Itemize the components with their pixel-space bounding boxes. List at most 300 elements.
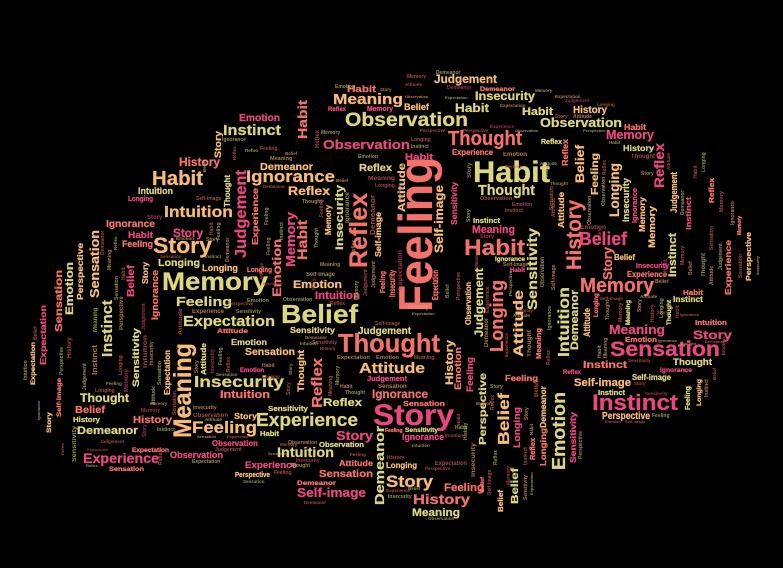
region: upper right lobe words: Habit bbox=[663, 259, 669, 272]
region: upper left lobe words: Ignorance bbox=[222, 137, 246, 143]
region: centre words: Judgement bbox=[358, 326, 412, 337]
region: tiny filler words: Memory bbox=[505, 164, 523, 169]
region: top centre words: Feeling bbox=[319, 199, 325, 217]
region: centre words: Insecurity bbox=[210, 349, 216, 373]
region: top centre words: Emotion bbox=[512, 202, 532, 208]
region: upper left lobe words: Perspective bbox=[59, 347, 65, 375]
region: upper right lobe words: Demeanor bbox=[680, 190, 686, 215]
region: upper right lobe words: Reflex bbox=[651, 143, 667, 188]
region: upper left lobe words bbox=[23, 113, 281, 473]
word: Belief khaki: Belief bbox=[281, 299, 358, 329]
region: top centre words: Memory bbox=[407, 74, 426, 80]
region: upper right lobe words: Thought bbox=[701, 253, 707, 277]
region: upper left lobe words: Sensation bbox=[87, 230, 102, 298]
region: upper right lobe words: Longing bbox=[606, 163, 622, 217]
region: upper left lobe words: Longing bbox=[95, 388, 115, 394]
region: lower right lobe words: Ignorance bbox=[660, 368, 693, 374]
region: tiny filler words: Attitude bbox=[540, 161, 557, 166]
region: top centre words: Observation bbox=[515, 128, 539, 133]
region: upper left lobe words: Sensitivity bbox=[72, 425, 78, 462]
region: upper right lobe words: Habit bbox=[693, 165, 699, 178]
word: History: History bbox=[563, 200, 586, 270]
region: middle vertical words: Perspective bbox=[508, 270, 513, 296]
region: upper left lobe words: History bbox=[179, 155, 220, 169]
region: lower right lobe words: Thought bbox=[667, 300, 673, 325]
region: lower words: Intuition bbox=[277, 444, 334, 460]
region: top centre words: Instinct bbox=[411, 144, 429, 150]
region: tiny filler words: Belief bbox=[285, 151, 298, 156]
region: upper left lobe words: Judgement bbox=[82, 363, 88, 390]
region: upper left lobe words: Demeanor bbox=[225, 237, 231, 262]
region: top centre words: Ignorance bbox=[495, 257, 526, 263]
region: tiny filler words: Memory bbox=[354, 281, 360, 300]
region: upper right lobe words: Attitude bbox=[551, 198, 557, 217]
word: Longing coral: Longing bbox=[487, 280, 507, 352]
word: Demeanor vertical: Demeanor bbox=[372, 426, 387, 505]
word: Observation vertical: Observation bbox=[464, 282, 473, 325]
region: centre words: Emotion bbox=[231, 338, 267, 347]
region: top centre words: Sensitivity bbox=[524, 228, 540, 310]
region: centre words: Feeling bbox=[465, 357, 475, 392]
region: upper right lobe words: Experience bbox=[627, 270, 668, 279]
region: top centre words: Experience bbox=[452, 148, 494, 157]
region: top centre words: Memory bbox=[283, 211, 298, 267]
region: upper right lobe words: Emotion bbox=[580, 225, 606, 231]
region: top centre words: Reflex bbox=[330, 301, 345, 307]
word: Feeling: Feeling bbox=[389, 157, 442, 312]
region: upper right lobe words: Habit bbox=[522, 106, 553, 118]
region: tiny filler words: Feeling bbox=[544, 164, 549, 180]
region: tiny filler words: Habit bbox=[262, 363, 275, 369]
region: lower right lobe words: Thought bbox=[527, 330, 533, 357]
word: Habit coral: Habit bbox=[464, 235, 526, 260]
region: lower right lobe words: Attitude bbox=[582, 308, 592, 337]
region: upper left lobe words: Feeling bbox=[122, 239, 153, 249]
region: top centre words: Habit bbox=[405, 152, 433, 162]
region: lower right lobe words: Story bbox=[657, 310, 669, 315]
region: lower right lobe words: Demeanor bbox=[705, 339, 725, 344]
region: tiny filler words: Observation bbox=[587, 196, 593, 225]
region: upper left lobe words: Sensation bbox=[54, 270, 65, 332]
region: lower right lobe words: Meaning bbox=[626, 300, 632, 325]
region: lower right lobe words: Emotion bbox=[605, 419, 622, 424]
region: tiny filler words: Longing bbox=[118, 355, 124, 375]
region: top centre words: Instinct bbox=[473, 218, 501, 225]
region: upper right lobe words: Longing bbox=[701, 152, 707, 172]
region: lower right lobe words: Feeling bbox=[685, 386, 692, 410]
region: lower right lobe words: Meaning bbox=[536, 328, 543, 359]
region: upper left lobe words: Story bbox=[173, 226, 203, 240]
region: upper left lobe words: Feeling bbox=[106, 381, 122, 386]
region: lower right lobe words: Habit bbox=[597, 345, 603, 358]
region: centre words: Experience bbox=[192, 309, 225, 315]
word: Feeling peach: Feeling bbox=[192, 418, 257, 437]
region: top centre words: Expectation bbox=[398, 250, 404, 290]
region: centre words: History bbox=[444, 339, 456, 385]
region: centre words: Attitude bbox=[178, 308, 184, 335]
region: upper left lobe words: Demeanor bbox=[77, 425, 139, 437]
region: top centre words: Ignorance bbox=[345, 191, 351, 223]
region: upper right lobe words: Perspective bbox=[744, 232, 753, 281]
region: tiny filler words: Reflex bbox=[245, 148, 259, 153]
region: tiny filler words: Story bbox=[206, 237, 219, 243]
region: upper right lobe words: Habit bbox=[683, 290, 704, 297]
region: top centre words: Attitude bbox=[405, 82, 422, 87]
region: centre words: Emotion bbox=[376, 355, 400, 361]
word: Belief pink: Belief bbox=[579, 229, 628, 249]
region: top centre words: Emotion bbox=[503, 152, 527, 158]
region: tiny filler words: Sensation bbox=[114, 276, 120, 300]
region: top centre words: Self-image bbox=[306, 272, 336, 278]
region: upper right lobe words: Judgement bbox=[565, 98, 590, 103]
region: centre words: Intuition bbox=[220, 389, 270, 401]
region: tiny filler words: Instinct bbox=[205, 254, 222, 259]
region: centre words: Sensation bbox=[243, 479, 265, 484]
region: lower right lobe words: Ignorance bbox=[680, 312, 700, 317]
region: middle vertical words bbox=[456, 249, 534, 357]
region: lower words: Longing bbox=[386, 461, 417, 470]
region: upper left lobe words: Feeling bbox=[176, 294, 232, 309]
region: tiny filler words: Habit bbox=[456, 413, 461, 425]
region: centre words: Expectation bbox=[337, 355, 371, 361]
region: lower words: Perspective bbox=[425, 466, 451, 471]
region: upper left lobe words: Observation bbox=[170, 450, 223, 460]
region: upper right lobe words: Judgement bbox=[669, 172, 679, 213]
region: centre words: Judgement bbox=[367, 376, 408, 383]
region: lower right lobe words: Reflex bbox=[563, 370, 582, 376]
region: lower right lobe words: Longing bbox=[594, 293, 600, 317]
region: upper right lobe words: Memory bbox=[638, 196, 647, 232]
region: upper left lobe words: Intuition bbox=[143, 335, 149, 368]
region: upper left lobe words: Demeanor bbox=[100, 230, 106, 255]
region: tiny filler words: Judgement bbox=[363, 269, 369, 296]
region: tiny filler words: Reflex bbox=[351, 240, 357, 255]
region: lower right lobe words: Feeling bbox=[652, 413, 670, 419]
region: upper left lobe words: Emotion bbox=[239, 113, 280, 124]
region: upper right lobe words: Ignorance bbox=[730, 201, 736, 225]
word: Instinct: Instinct bbox=[99, 300, 116, 357]
region: lower words: Reflex bbox=[530, 438, 537, 460]
region: upper left lobe words: Intuition bbox=[23, 360, 29, 380]
region: top centre words: Judgement bbox=[434, 72, 497, 86]
region: top centre words: Intuition bbox=[315, 290, 360, 302]
region: top centre words: Memory bbox=[324, 204, 333, 235]
region: tiny filler words: Reflex bbox=[490, 395, 496, 410]
region: upper left lobe words: Expectation bbox=[192, 459, 220, 465]
region: top centre words: Insecurity bbox=[388, 270, 397, 297]
region: top centre words: Emotion bbox=[270, 239, 284, 297]
word: Story right: Story bbox=[693, 328, 732, 342]
region: lower right lobe words: Emotion bbox=[721, 337, 726, 355]
word: Memory coral: Memory bbox=[580, 275, 655, 297]
region: top centre words: Demeanor bbox=[447, 85, 472, 91]
region: top centre words: Meaning bbox=[368, 176, 395, 182]
region: upper left lobe words: Habit bbox=[128, 230, 153, 240]
region: centre words: Sensitivity bbox=[405, 428, 439, 434]
region: upper right lobe words: Reflex bbox=[709, 178, 716, 203]
region: centre words: Feeling bbox=[385, 428, 403, 434]
region: centre words: Attitude bbox=[205, 417, 222, 422]
region: top centre words: Habit bbox=[347, 84, 376, 94]
region: lower right lobe words bbox=[527, 287, 732, 424]
region: centre words: Thought bbox=[296, 350, 306, 392]
region: upper left lobe words: Ignorance bbox=[106, 219, 155, 230]
region: lower words: Feeling bbox=[444, 482, 484, 494]
region: lower right lobe words: Demeanor bbox=[569, 289, 581, 350]
region: upper right lobe words: Instinct bbox=[686, 196, 693, 230]
word: Intuition vertical: Intuition bbox=[556, 287, 573, 357]
region: upper right lobe words: Belief bbox=[573, 144, 587, 183]
region: lower right lobe words: Perspective bbox=[602, 411, 650, 422]
region: upper right lobe words: Insecurity bbox=[636, 263, 669, 270]
region: tiny filler words: Intuition bbox=[300, 341, 318, 346]
word: Observation: Observation bbox=[345, 110, 468, 131]
region: centre words: Reflex bbox=[323, 397, 363, 409]
region: centre words: Thought bbox=[290, 463, 310, 469]
region: upper left lobe words: Story bbox=[47, 411, 53, 433]
region: top centre words: Demeanor bbox=[480, 87, 516, 93]
region: upper left lobe words: Expectation bbox=[132, 447, 169, 454]
region: top centre words: Self-image bbox=[503, 262, 529, 268]
region: top centre words bbox=[246, 70, 550, 312]
word: Attitude peach: Attitude bbox=[510, 290, 526, 357]
word: Ignorance: Ignorance bbox=[246, 167, 335, 186]
region: upper right lobe words: Sensation bbox=[738, 254, 744, 278]
region: upper right lobe words: Memory bbox=[535, 88, 553, 93]
region: centre words: Memory bbox=[335, 366, 341, 385]
region: upper left lobe words: Self-image bbox=[56, 378, 63, 417]
region: upper right lobe words: Story bbox=[641, 171, 654, 177]
region: lower right lobe words: Thought bbox=[680, 341, 697, 346]
region: tiny filler words: Habit bbox=[209, 222, 215, 235]
region: upper right lobe words: Attitude bbox=[557, 191, 566, 228]
region: upper left lobe words: Story bbox=[213, 130, 224, 158]
region: top centre words: Meaning bbox=[472, 224, 515, 236]
region: tiny filler words: Feeling bbox=[350, 452, 366, 457]
region: tiny filler words: Longing bbox=[262, 374, 280, 379]
region: lower right lobe words: Intuition bbox=[695, 320, 727, 327]
region: upper left lobe words: Intuition bbox=[138, 186, 173, 196]
region: upper right lobe words: Instinct bbox=[667, 233, 679, 277]
region: upper left lobe words: History bbox=[73, 417, 100, 424]
word: Thought coral: Thought bbox=[338, 328, 440, 358]
region: lower words: Memory bbox=[506, 466, 512, 485]
region: top centre words: Ignorance bbox=[263, 281, 283, 286]
region: lower right lobe words: Longing bbox=[696, 379, 703, 406]
region: centre words: Sensitivity bbox=[236, 309, 261, 315]
region: upper left lobe words: Experience bbox=[87, 447, 109, 452]
region: centre words: Story bbox=[490, 384, 503, 390]
region: centre words: Belief bbox=[496, 392, 513, 445]
region: lower words: Belief bbox=[408, 486, 421, 491]
region: centre words: Sensation bbox=[216, 372, 238, 377]
region: tiny filler words: Thought bbox=[605, 300, 611, 320]
region: centre words: Attitude bbox=[201, 343, 208, 375]
region: centre words: Expectation bbox=[412, 311, 435, 316]
region: lower words: Observation bbox=[428, 516, 455, 521]
region: centre words: History bbox=[320, 346, 336, 351]
region: lower words: Sensitivity bbox=[523, 475, 529, 500]
region: top centre words: Habit bbox=[455, 101, 489, 115]
region: top centre words: Sensitivity bbox=[450, 181, 459, 225]
region: upper right lobe words: Longing bbox=[597, 102, 615, 107]
region: centre words: Sensitivity bbox=[268, 451, 289, 456]
word: Habit large: Habit bbox=[473, 156, 550, 189]
region: tiny filler words: Self-image bbox=[551, 264, 557, 290]
region: lower words: Perspective bbox=[578, 431, 584, 459]
region: lower words: Experience bbox=[386, 488, 411, 493]
word: Meaning vertical: Meaning bbox=[169, 343, 197, 438]
region: upper right lobe words bbox=[522, 88, 760, 304]
region: tiny filler words bbox=[100, 84, 665, 457]
region: upper right lobe words: Belief bbox=[655, 279, 669, 285]
region: tiny filler words: Emotion bbox=[335, 84, 355, 90]
region: upper left lobe words: Story bbox=[141, 261, 150, 284]
region: top centre words: Demeanor bbox=[436, 70, 461, 76]
region: upper right lobe words: Memory bbox=[737, 216, 743, 235]
region: upper left lobe words: Intuition bbox=[164, 204, 233, 221]
region: centre words: Memory bbox=[280, 442, 298, 447]
region: upper left lobe words: Belief bbox=[33, 326, 39, 340]
region: lower right lobe words: Sensitivity bbox=[628, 358, 651, 363]
region: upper left lobe words: Story bbox=[142, 424, 148, 437]
region: tiny filler words: History bbox=[463, 423, 469, 440]
region: top centre words: Judgement bbox=[371, 261, 377, 288]
region: lower right lobe words: Thought bbox=[673, 357, 712, 367]
region: centre words: Feeling bbox=[274, 470, 292, 476]
region: middle vertical words: Attitude bbox=[513, 313, 530, 318]
region: upper right lobe words: History bbox=[623, 144, 655, 153]
region: upper left lobe words: Self-image bbox=[196, 196, 222, 202]
region: tiny filler words: Meaning bbox=[107, 250, 113, 270]
region: centre words: Habit bbox=[455, 425, 468, 431]
word: Memory pink: Memory bbox=[606, 127, 655, 142]
region: tiny filler words: Reflex bbox=[232, 146, 237, 160]
region: top centre words: Thought bbox=[302, 199, 322, 205]
region: centre words: History bbox=[408, 305, 429, 311]
region: middle vertical words: Demeanor bbox=[484, 317, 490, 347]
region: upper right lobe words: Reflex bbox=[541, 139, 562, 146]
region: top centre words: Reflex bbox=[288, 184, 330, 198]
region: lower words: Belief bbox=[480, 477, 486, 492]
region: lower right lobe words: Ignorance bbox=[658, 338, 678, 343]
region: top centre words: Meaning bbox=[270, 156, 292, 162]
region: upper left lobe words: Perspective bbox=[76, 242, 85, 300]
region: upper right lobe words: Insecurity bbox=[755, 255, 760, 275]
region: middle vertical words: Meaning bbox=[474, 249, 479, 268]
region: tiny filler words: Story bbox=[597, 228, 602, 240]
region: top centre words: Longing bbox=[411, 137, 431, 143]
region: upper left lobe words: Meaning bbox=[93, 307, 99, 332]
region: lower right lobe words: Instinct bbox=[704, 379, 710, 397]
region: upper left lobe words: Expectation bbox=[39, 305, 48, 365]
region: centre words: Demeanor bbox=[305, 335, 327, 340]
word: Reflex large: Reflex bbox=[345, 193, 373, 268]
region: lower words: Belief bbox=[510, 467, 521, 504]
region: centre words: Sensation bbox=[172, 391, 178, 415]
region: centre words: Experience bbox=[245, 460, 297, 470]
region: top centre words: Feeling bbox=[266, 237, 272, 255]
region: tiny filler words: Judgement bbox=[100, 439, 125, 444]
region: middle vertical words: Experience bbox=[504, 332, 509, 357]
region: top centre words: Expectation bbox=[431, 270, 440, 300]
word: Instinct pink: Instinct bbox=[592, 390, 679, 415]
region: upper left lobe words: Judgement bbox=[141, 303, 147, 330]
region: top centre words: Story bbox=[380, 87, 392, 92]
region: tiny filler words: Attitude bbox=[151, 386, 157, 405]
region: top centre words: Emotion bbox=[293, 279, 342, 291]
word: Reflex coral: Reflex bbox=[309, 357, 326, 408]
region: tiny filler words: Ignorance bbox=[547, 306, 553, 330]
word: Habit: Habit bbox=[152, 168, 203, 190]
region: top centre words: Story bbox=[480, 234, 495, 240]
region: centre words: Insecurity bbox=[296, 458, 320, 464]
region: top centre words: Meaning bbox=[320, 262, 340, 268]
region: lower words: Belief bbox=[498, 489, 505, 512]
region: centre words: Judgement bbox=[215, 447, 242, 453]
region: centre words: Intuition bbox=[412, 443, 430, 448]
region: upper right lobe words: Attitude bbox=[666, 153, 671, 170]
region: centre words: Attitude bbox=[217, 328, 248, 335]
region: lower words: Belief bbox=[534, 380, 540, 397]
region: top centre words: Observation bbox=[283, 297, 312, 303]
region: tiny filler words: Insecurity bbox=[149, 341, 155, 365]
region: top centre words: Observation bbox=[405, 94, 429, 99]
region: upper left lobe words: Sensitivity bbox=[131, 328, 141, 387]
region: top centre words: Belief bbox=[336, 178, 349, 183]
region: top centre words: Insecurity bbox=[334, 184, 346, 250]
region: tiny filler words: Habit bbox=[529, 423, 534, 435]
region: centre words: Emotion bbox=[453, 347, 463, 390]
region: lower words: Expectation bbox=[435, 461, 467, 467]
region: tiny filler words: Sensation bbox=[549, 186, 555, 210]
word: Observation khaki: Observation bbox=[540, 115, 622, 130]
region: upper right lobe words: Reflex bbox=[602, 160, 608, 175]
region: top centre words: Belief bbox=[404, 102, 430, 112]
region: upper left lobe words: Instinct bbox=[92, 344, 99, 375]
region: upper right lobe words: Sensation bbox=[709, 226, 715, 250]
word: Meaning: Meaning bbox=[333, 91, 403, 108]
region: top centre words: Belief bbox=[445, 284, 451, 298]
region: centre words: Meaning bbox=[414, 355, 434, 361]
region: upper left lobe words: Longing bbox=[158, 258, 200, 269]
region: upper left lobe words: Sensation bbox=[109, 466, 144, 473]
region: upper left lobe words: Reflex bbox=[158, 450, 164, 465]
region: top centre words: Emotion bbox=[358, 154, 378, 160]
region: lower words: Demeanor bbox=[297, 480, 337, 487]
region: centre words: Feeling bbox=[218, 347, 224, 365]
region: top centre words: Thought bbox=[478, 182, 535, 199]
region: centre words: Insecurity bbox=[193, 405, 217, 411]
region: upper right lobe words: Habit bbox=[609, 140, 621, 145]
word: Judgement khaki: Judgement bbox=[472, 268, 486, 337]
region: lower right lobe words: Meaning bbox=[603, 338, 609, 358]
region: centre words: Sensation bbox=[378, 384, 407, 390]
region: upper left lobe words: Thought bbox=[223, 175, 232, 207]
region: centre words: Sensitivity bbox=[290, 326, 336, 335]
region: upper left lobe words: Emotion bbox=[64, 262, 76, 315]
region: lower right lobe words: Story bbox=[637, 299, 643, 312]
region: tiny filler words: History bbox=[650, 305, 656, 322]
region: upper right lobe words: Memory bbox=[680, 246, 686, 265]
region: top centre words: Instinct bbox=[505, 208, 523, 214]
region: upper right lobe words: Belief bbox=[614, 253, 635, 262]
region: top centre words: Story bbox=[467, 162, 473, 178]
region: tiny filler words: Thought bbox=[550, 181, 568, 186]
region: lower words: Longing bbox=[539, 428, 548, 466]
region: centre words: Observation bbox=[288, 440, 317, 446]
region: centre words bbox=[157, 299, 538, 484]
